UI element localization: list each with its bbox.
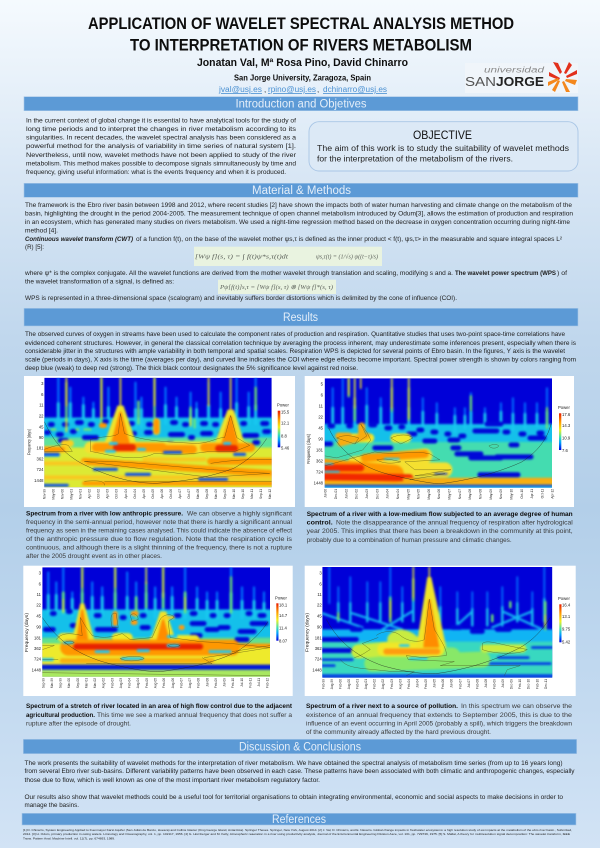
y axis 2: 1448: [314, 481, 324, 486]
x axis 3: Mar-01: [84, 678, 88, 688]
y axis 4: 3: [319, 570, 322, 575]
legend 1: 15.5: [281, 410, 290, 414]
text block: discussion: from several Ebro river sub-basins. Different variability patterns have been observed in each case. These patterns have been associated with both climatic and anthropogenic changes, especially: [24, 768, 575, 775]
x axis 1: Nov-00: [61, 489, 65, 499]
x axis 1: Oct-03: [115, 489, 119, 499]
title: APPLICATION OF WAVELET SPECTRAL ANALYSIS METHOD: [88, 15, 514, 33]
caption: low anthropic pressure: We can observe a highly significant: [187, 510, 292, 518]
caption: low anthropic pressure: Spectrum from a river with low anthropic pressure.: [26, 510, 183, 518]
x axis 4: Dec-10: [527, 679, 531, 689]
formula: continuous wavelet transform: ψs,τ(t) = (1/√s) ψ((t−τ)/s): [316, 252, 378, 260]
y axis 3: 6: [39, 581, 42, 586]
section heading: Introduction and Objetives: [24, 97, 578, 111]
x axis 3: Jul-09: [222, 678, 226, 687]
x axis 2: May-08: [468, 489, 472, 500]
y axis 2: 362: [316, 458, 324, 463]
x axis 2: Nov-08: [478, 489, 482, 499]
y axis 2: 181: [316, 447, 324, 452]
x axis 3: Feb-08: [197, 678, 201, 688]
x axis 3: Feb-09: [214, 678, 218, 688]
caption: low-medium flow: Spectrum of a river with a low-medium flow subjected to an average degree of human: [307, 511, 573, 518]
x axis 1: Apr-07: [178, 489, 182, 499]
x axis 3: Aug-03: [119, 678, 123, 688]
y axis 1: 362: [36, 456, 44, 461]
x axis 1: Mar-09: [214, 489, 218, 499]
x axis 2: Oct-10: [520, 489, 524, 499]
caption: low-medium flow: probably due to a combination of human pressure and climatic changes.: [307, 537, 512, 544]
caption: high flow control: This time we see a marked annual frequency that does not suffer a: [97, 712, 292, 719]
text block: introduction: frequency, giving useful information: what is the events frequency and when it is produced.: [26, 169, 286, 176]
x axis 3: Feb-11: [248, 678, 252, 688]
y axis 4: 362: [315, 646, 322, 651]
text block: results: evidenced coherent structures. However, in general the classical correlation technique by averaging the process inherent, may underestimate some inferences present, especially when there is: [25, 340, 577, 347]
x axis 3: Aug-07: [188, 678, 192, 688]
chart: spectrum source of pollution: [304, 566, 576, 696]
x axis 3: Feb-04: [128, 678, 132, 688]
x axis 1: Sep-10: [241, 489, 245, 499]
y axis 1: 45: [39, 424, 44, 429]
x axis 2: Dec-03: [375, 489, 379, 499]
x axis 1: Oct-05: [151, 489, 155, 499]
x axis 3: [41, 678, 270, 688]
text block: results: deep blue (weak) to deep red (strong). The thick black contour designates the 5% significance level against red noise.: [25, 365, 358, 372]
logo: universidad San Jorge: JORGE: [496, 74, 544, 89]
x axis 1: Oct-06: [169, 489, 173, 499]
x axis 3: Aug-05: [154, 678, 158, 688]
text block: discussion: manage the basins.: [24, 802, 79, 809]
x axis 1: Apr-06: [160, 489, 164, 499]
caption: low anthropic pressure: frequency in the semi-annual period, however note that there is hardly a significant annual: [26, 519, 293, 526]
legend 3: Power: [275, 595, 287, 600]
caption: low anthropic pressure: frequency as seen in the remaining cases analysed. This could indicate the absence of effect: [26, 528, 292, 534]
x axis 1: Mar-11: [250, 489, 254, 499]
x axis 2: Dec-01: [334, 489, 338, 499]
text block: wavelet power spectrum: ) of: [557, 270, 567, 277]
y axis 1: 1448: [34, 478, 44, 483]
formula: continuous wavelet transform: [194, 247, 382, 266]
x axis 3: Feb-03: [110, 678, 114, 688]
x axis 2: May-09: [489, 489, 493, 500]
x axis 4: Aug-03: [398, 679, 402, 689]
caption: high flow control: [26, 703, 293, 728]
section heading: Introduction and Objetives: Introduction and Objetives: [236, 99, 367, 111]
y axis 4: 90: [317, 624, 322, 629]
caption: low-medium flow: control.: [307, 520, 333, 526]
text block: scalogram note: WPS is represented in a three-dimensional space (scalogram) and inevitably suffers border distortions which is delimited by the cone of influence (COI).: [25, 295, 457, 302]
x axis 3: Feb-07: [179, 678, 183, 688]
x axis 4: Feb-10: [518, 679, 522, 689]
legend 2: Power: [558, 405, 570, 410]
legend 4: 16.4: [562, 603, 571, 608]
y axis 3: 362: [34, 646, 42, 651]
contact emails: dchinarro@usj.es: [323, 85, 387, 94]
caption: low-medium flow: Note the disappearance of the annual frequency of respiration after hydrological: [336, 520, 573, 526]
x axis 2: Jul-00: [324, 489, 328, 498]
caption: high flow control: Spectrum of a stretch of river located in an area of high flow control due to the adjacent: [26, 703, 293, 710]
x axis 3: Mar-00: [67, 678, 71, 688]
text block: introduction: singularities. In recent decades, the wavelet spectral analysis has been considered as a: [26, 135, 296, 142]
x axis 4: Feb-07: [458, 679, 462, 689]
y axis 4: Frequency (days): [304, 612, 310, 652]
text block: methods: of a function f(t), on the base of the wavelet mother ψs,τ is defined as the inner product < f(t), ψs,τ> in the measurable and square integral spaces L²: [136, 236, 563, 243]
y axis 1: 11: [39, 403, 44, 408]
text block: introduction: metabolism. This method makes possible to decompose signals simnultaneously by time and: [26, 160, 296, 168]
y axis 3: 22: [36, 603, 42, 608]
y axis 3: 45: [36, 614, 42, 619]
x axis 1: Apr-05: [142, 489, 146, 499]
caption: low anthropic pressure: continuous, and although there is a slight thinning of the frequency, there is not a rupture: [26, 544, 292, 552]
x axis 4: Aug-02: [381, 679, 385, 689]
x axis 1: Mar-08: [196, 489, 200, 499]
y axis 3: 724: [34, 657, 42, 662]
x axis 3: Jul-10: [240, 678, 244, 687]
caption: high flow control: rupture after the episode of drought.: [26, 720, 131, 728]
logo: universidad San Jorge: universidad: [484, 64, 544, 74]
x axis 2: Apr-12: [551, 489, 555, 499]
text block: references: [23, 828, 572, 840]
x axis 3: Feb-06: [162, 678, 166, 688]
authors: Jonatan Val, Mª Rosa Pino, David Chinarro: [197, 57, 409, 69]
x axis 4: Jul-04: [416, 679, 420, 688]
text block: wavelet power spectrum: The wavelet power spectrum (WPS: [455, 270, 556, 277]
x axis 4: Feb-02: [373, 679, 377, 689]
legend 3: 14.7: [279, 613, 288, 618]
formula: continuous wavelet transform: [Wψ f](s, τ) = ∫ f(t)ψ*s,τ(t)dt: [195, 254, 288, 260]
caption: source of pollution: existence of an annual frequency that extends to September 2005, this is due to the: [306, 712, 572, 719]
x axis 3: Sep-00: [76, 678, 80, 688]
y axis 1: 724: [36, 467, 44, 472]
section heading: Material & Methods: Material & Methods: [252, 185, 351, 197]
logo: universidad San Jorge: [465, 62, 578, 93]
x axis 2: May-10: [510, 489, 514, 500]
title: TO INTERPRETATION OF RIVERS METABOLISM: [130, 37, 472, 55]
text block: results: scale (periods in days), X axis is the time (averages per day), and curved line indicates the COI where edge effects become important. Spectral power strength is shown by colors ranging from: [25, 356, 576, 364]
y axis 2: 5: [321, 382, 324, 386]
section heading: Results: Results: [283, 312, 318, 324]
y axis 2: 11: [319, 403, 324, 408]
y axis 4: 181: [315, 635, 322, 640]
legend 3: 8.07: [279, 638, 288, 643]
y axis 1: 6: [41, 392, 44, 397]
x axis 3: Aug-06: [171, 678, 175, 688]
y axis 3: Frequency (days): [24, 612, 29, 652]
y axis 4: 6: [319, 581, 322, 586]
legend 2: [558, 405, 571, 453]
caption: source of pollution: of the community already affected by the hard previous drought.: [306, 729, 491, 736]
y axis 4: 22: [317, 603, 322, 608]
text block: introduction: [26, 118, 297, 176]
contact emails: [218, 85, 387, 94]
formula: wavelet power spectrum: Pψ[f(t)]s,τ = [Wψ f](s, τ) ⊗ [Wψ f]*(s, τ): [219, 284, 333, 291]
legend 4: 5.42: [562, 639, 571, 644]
callout: objective: [309, 122, 578, 171]
x axis 2: Jun-02: [344, 489, 348, 499]
callout: objective: The aim of this work is to study the suitability of wavelet methods: [317, 144, 569, 153]
legend 1: 5.46: [281, 446, 290, 450]
y axis 1: 22: [39, 413, 44, 418]
section heading: Results: [24, 308, 578, 326]
caption: source of pollution: influence of an event occurring in April 2005 (probably a spill), which triggers the breakdown: [306, 720, 572, 728]
text block: introduction: powerful method for the analysis of variability in time series of natural system [1].: [26, 143, 296, 150]
y axis 2: 90: [318, 436, 324, 441]
affiliation: San Jorge University, Zaragoza, Spain: [234, 74, 371, 83]
text block: methods: in an ecosystem, which has generated many studies on rivers metabolism. We used a night-time regression method based on the decrease in oxygen concentration occurring during night-time: [25, 219, 570, 226]
y axis 1: 90: [39, 435, 44, 440]
text block: introduction: In the current context of global change it is essential to have analytical tools for the study of: [26, 118, 296, 124]
text block: methods: Continuous wavelet transform (CWT): [25, 236, 134, 243]
y axis 1: [26, 381, 44, 483]
y axis 2: 22: [318, 414, 324, 419]
x axis 2: [324, 489, 555, 500]
y axis 1: 3: [41, 381, 44, 386]
legend 1: Power: [277, 403, 289, 408]
x axis 3: Aug-04: [136, 678, 140, 688]
x axis 4: Feb-08: [475, 679, 479, 689]
heatmap 3: [42, 567, 270, 677]
y axis 3: [24, 570, 42, 673]
caption: high flow control: agricultural production.: [26, 712, 95, 719]
x axis 2: Nov-05: [417, 489, 421, 499]
x axis 4: Jul-07: [467, 679, 471, 688]
x axis 2: Nov-07: [458, 489, 462, 499]
callout: objective: OBJECTIVE: [413, 128, 472, 142]
x axis 1: Sep-08: [205, 489, 209, 499]
legend 1: 12.1: [281, 420, 290, 426]
x axis 1: Mar-10: [232, 489, 236, 499]
contact emails: jval@usj.es: [218, 85, 262, 94]
x axis 4: Jul-09: [501, 679, 505, 688]
x axis 1: May-00: [52, 489, 56, 500]
x axis 4: Aug-99: [330, 679, 334, 689]
legend 4: [558, 596, 571, 644]
x axis 4: Dec-09: [510, 679, 514, 689]
x axis 4: Feb-04: [407, 679, 411, 689]
x axis 2: Nov-06: [437, 489, 441, 499]
x axis 4: Feb-99: [321, 679, 325, 689]
x axis 1: Sep-11: [259, 489, 263, 499]
x axis 2: Nov-04: [396, 489, 400, 499]
x axis 4: [321, 679, 548, 689]
x axis 1: Apr-04: [124, 489, 128, 499]
text block: references: [1] D. Chinarro, System Engineering Applied to Fuenmayor Karst Aquifer (San Julián de Banzo, Huesca) and Collins Glacier (King George Island, Antarctica). Springer Theses. Springer, New York, August 2014. [2] J. Val, D. Chinarro, and E. Navarro. Global change impacts in freshwater ecosystems: a high resolution study of ew impacts at the metabolism of the ebro river basin., Submitted,: [23, 828, 572, 832]
x axis 1: Sep-09: [223, 489, 227, 499]
text block: methods: (R) [5]:: [25, 244, 44, 251]
x axis 3: Feb-10: [231, 678, 235, 688]
x axis 3: Feb-05: [145, 678, 149, 688]
caption: source of pollution: [306, 703, 572, 736]
section heading: Discussion & Conclusions: Discussion & Conclusions: [239, 741, 361, 753]
x axis 2: Dec-02: [355, 489, 359, 499]
legend 2: 17.6: [562, 412, 571, 417]
y axis 3: 1448: [32, 668, 42, 673]
text block: methods: basin, highlighting the drought in the period 2004-2005. The measurement technique of open channel metabolism introduced by Odum[3], allows the estimation of production and respiration: [25, 210, 573, 218]
x axis 4: Feb-05: [424, 679, 428, 689]
section heading: References: [22, 813, 576, 826]
x axis 1: Oct-04: [133, 489, 137, 499]
text block: results: considerable jitter in the structures with ample variability in both temporal and spatial scales. Respiration WPS is depicted for several points of Ebro basin. In the figures, Y axis is the wavelet: [25, 348, 565, 355]
formula: wavelet power spectrum: [218, 280, 336, 294]
text block: wavelet power spectrum: [24, 270, 567, 286]
text block: discussion: The work presents the suitability of wavelet methods for the interpretation of river metabolism. We have obtained the spectral analysis of metabolism time series (from up to 16 years long): [24, 760, 562, 767]
legend 3: 18.1: [279, 602, 288, 607]
x axis 4: Feb-00: [338, 679, 342, 689]
text block: discussion: Our results also show that wavelet methods could be a useful tool for territorial organisations to obtain integrating environmental, economic and social aspects to make decisions in order to: [24, 794, 563, 801]
x axis 1: Oct-07: [187, 489, 191, 499]
text block: discussion: [24, 760, 575, 809]
text block: results: The observed curves of oxygen in streams have been used to calculate the component rates of production and respiration. Quantitative studies that uses two-point space-time correlations have: [25, 331, 565, 338]
x axis 3: Jul-08: [205, 678, 209, 687]
section heading: Material & Methods: [24, 183, 578, 197]
legend 2: 14.3: [562, 423, 571, 428]
x axis 1: Nov-01: [79, 489, 83, 499]
caption: low anthropic pressure: after the 2005 drought event as in other places.: [26, 553, 162, 560]
text block: wavelet power spectrum: the wavelet transformation of a signal, is defined as:: [25, 278, 174, 286]
x axis 2: Jun-04: [386, 489, 390, 499]
x axis 4: Aug-00: [347, 679, 351, 689]
callout: objective: for the interpretation of the metabolism of the rivers.: [317, 155, 513, 164]
legend 4: 13.1: [562, 614, 571, 619]
caption: low-medium flow: [307, 511, 573, 544]
x axis 4: Feb-09: [492, 679, 496, 689]
x axis 2: Apr-11: [530, 489, 534, 498]
x axis 1: May-01: [70, 489, 74, 500]
text block: discussion: those due to flow, which is well known as one of the most important river metabolism regulatory factor.: [24, 777, 320, 784]
legend 1: 8.8: [281, 434, 287, 438]
text block: methods: [25, 202, 573, 251]
x axis 1: Oct-02: [97, 489, 101, 499]
x axis 2: May-05: [406, 489, 410, 500]
chart: spectrum low anthropic pressure: [24, 376, 295, 507]
contact emails: rpino@usj.es: [268, 85, 316, 94]
heatmap 4: [322, 567, 552, 678]
x axis 3: Mar-99: [50, 678, 54, 688]
legend 4: Power: [558, 596, 570, 601]
text block: introduction: long time periods and to interpret the changes in river metabolism according to its: [26, 126, 297, 133]
x axis 3: Mar-02: [93, 678, 97, 688]
y axis 3: 90: [36, 624, 42, 629]
x axis 2: May-06: [427, 489, 431, 500]
x axis 4: Feb-10: [535, 679, 539, 689]
x axis 1: Apr-03: [106, 489, 110, 499]
y axis 2: [306, 382, 324, 486]
legend 3: [275, 595, 288, 643]
x axis 4: Feb-03: [390, 679, 394, 689]
legend 2: 7.6: [562, 448, 568, 453]
contact emails: ,: [264, 85, 266, 94]
y axis 2: Frequency (days): [306, 433, 311, 464]
text block: references: Trans. Pattern Anal. Machine Intell. vol. 11(7), pp. 674693, 1989.: [23, 836, 115, 840]
section heading: Discussion & Conclusions: [23, 739, 577, 754]
y axis 4: 45: [317, 614, 322, 619]
x axis 3: Aug-02: [102, 678, 106, 688]
x axis 4: Feb-01: [356, 679, 360, 689]
legend 4: 9.75: [562, 627, 571, 632]
x axis 1: Mar-12: [268, 489, 272, 499]
section heading: References: References: [272, 814, 326, 826]
y axis 3: 3: [39, 570, 42, 575]
heatmap 2: [324, 378, 552, 488]
x axis 2: Jun-03: [365, 489, 369, 499]
heatmap 1: [44, 378, 272, 488]
x axis 3: Sep-99: [41, 678, 45, 688]
text block: introduction: Nevertheless, until now, wavelet methods have not been applied to study of the river: [26, 152, 297, 159]
x axis 4: Aug-01: [364, 679, 368, 689]
y axis 2: 6: [321, 392, 324, 398]
x axis 2: May-07: [448, 489, 452, 500]
x axis 2: Oct-11: [540, 489, 544, 498]
text block: results: [25, 331, 577, 372]
y axis 4: [304, 570, 322, 673]
y axis 2: 724: [316, 469, 324, 474]
x axis 3: Jul-11: [257, 678, 261, 686]
y axis 4: 724: [315, 657, 322, 662]
text block: methods: The framework is the Ebro river basin between 1998 and 2012, where recent studies [2] have shown the impacts both of water human harvesting and climate change on the metabolism of the: [25, 202, 572, 209]
caption: low-medium flow: year 2005. This implies that there has been a breakdown in the community at this point,: [307, 528, 573, 535]
chart: spectrum high flow control: [23, 566, 293, 696]
x axis 3: Feb-12: [266, 678, 270, 688]
logo: universidad San Jorge: SAN: [465, 74, 496, 89]
legend 1: [277, 403, 290, 450]
x axis 4: Jul-05: [433, 679, 437, 688]
x axis 2: Nov-09: [499, 489, 503, 499]
x axis 3: Sep-99: [59, 678, 63, 688]
text block: methods: method [4].: [25, 228, 58, 234]
caption: low anthropic pressure: of the anthropic pressure due to flow regulation. Note that the respiration cycle is: [26, 536, 293, 543]
caption: source of pollution: In this spectrum we can observe the: [461, 703, 572, 710]
legend 3: 11.4: [279, 626, 288, 631]
caption: low anthropic pressure: [26, 510, 293, 560]
y axis 4: 1448: [312, 668, 322, 673]
x axis 4: Jul-08: [484, 679, 488, 688]
y axis 3: 11: [37, 592, 42, 597]
y axis 2: 45: [318, 425, 324, 430]
y axis 3: 181: [34, 635, 42, 640]
title: [88, 15, 514, 55]
x axis 4: Dec-11: [544, 679, 548, 689]
x axis 1: Nov-99: [42, 489, 46, 499]
x axis 4: Feb-06: [441, 679, 445, 689]
y axis 4: 11: [317, 592, 322, 597]
x axis 1: [42, 489, 272, 500]
contact emails: ,: [317, 85, 319, 94]
chart: spectrum low-medium flow: [305, 376, 574, 507]
x axis 1: Apr-02: [88, 489, 92, 499]
y axis 1: Frequency (days): [26, 429, 32, 455]
x axis 4: Jul-06: [450, 679, 454, 688]
legend 2: 10.9: [562, 436, 571, 441]
text block: references: 2014. [3] H. Odum, primary production in owing waters. Limnology and Oceanography, vol. 1, pp. 102117, 1956. [4] G. Hornberger and M. Kelly, Atmospheric reaeration in a river using productivity analysis, Journal of the Environmental Engineering Division Asce, vol. 101, pp. 729739, 1975. [5] S. Mallat, A theory for multiresolution signal decomposition: The wavelet transform, IEEE: [23, 832, 570, 836]
y axis 1: 181: [36, 445, 44, 450]
caption: source of pollution: Spectrum of a river next to a source of pollution.: [306, 703, 458, 710]
text block: wavelet power spectrum: where ψ* is the complex conjugate. All the wavelet functions are derived from the mother wavelet through translation and scaling, modifying s and a.: [24, 270, 453, 277]
